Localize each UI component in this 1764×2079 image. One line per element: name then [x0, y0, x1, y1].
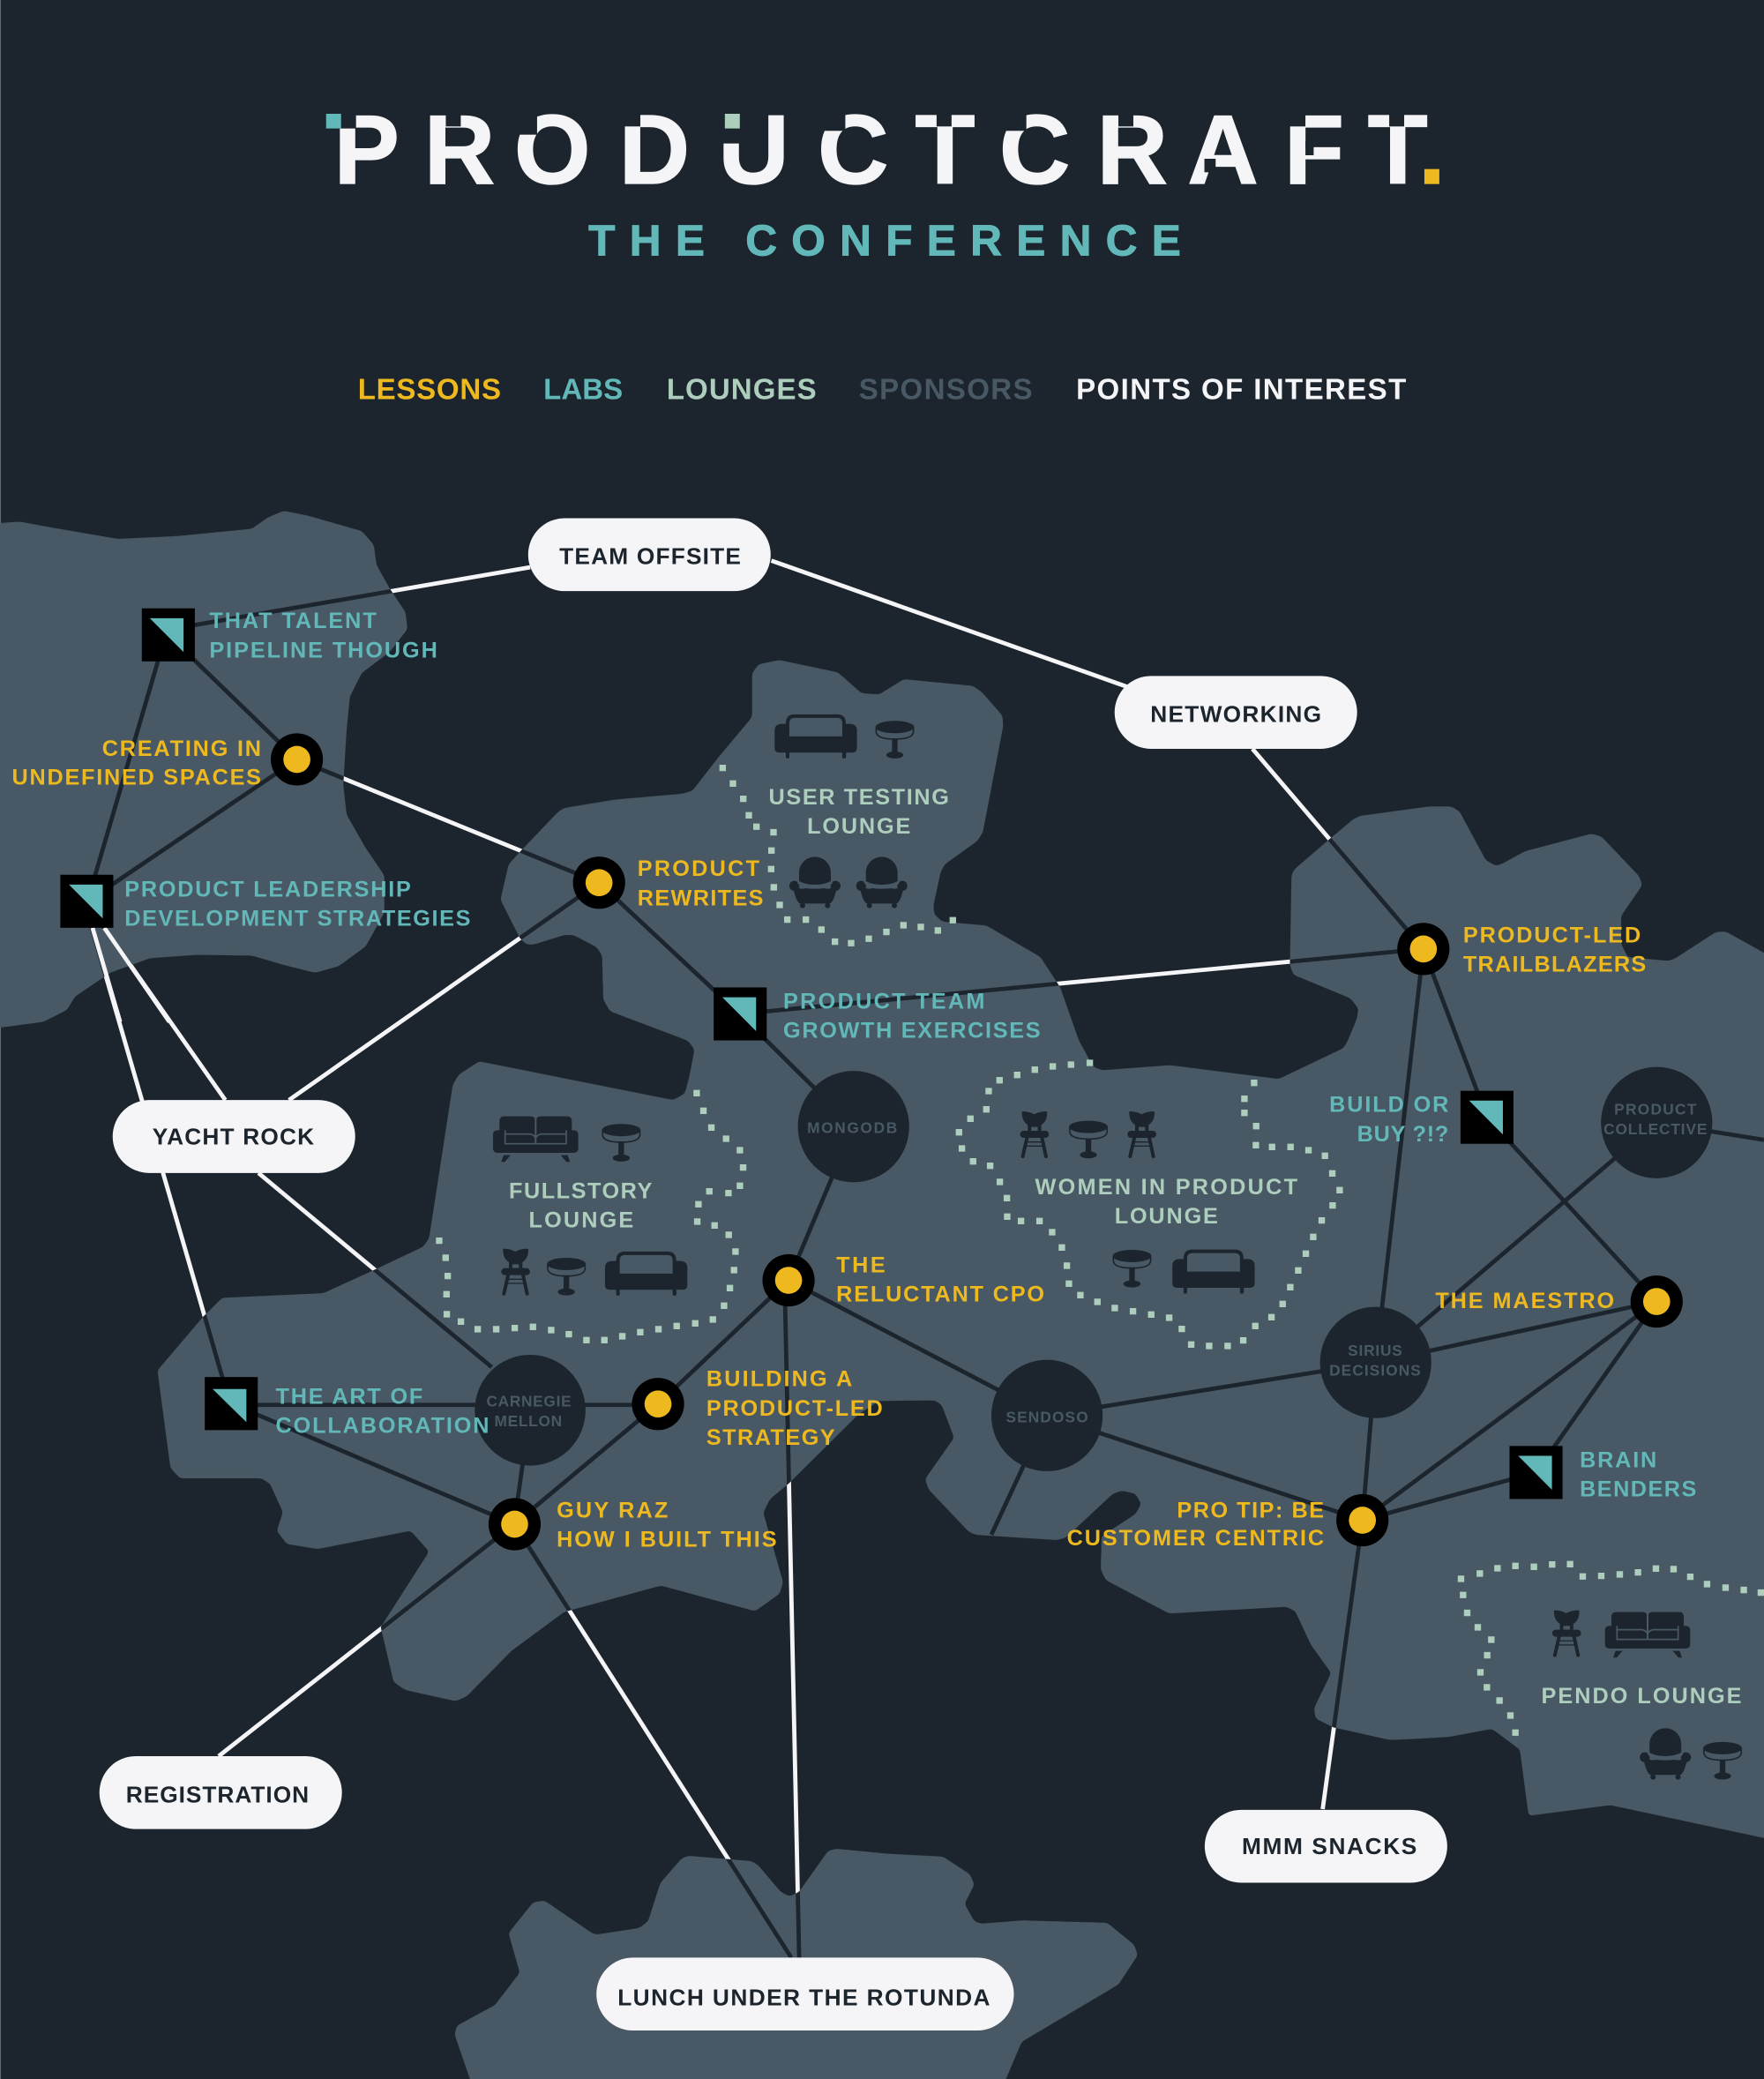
- label: Build or buy: [1329, 1093, 1448, 1147]
- label: Fullstory lounge: [509, 1178, 652, 1232]
- lab node: Product team growth: [714, 987, 766, 1041]
- label: Brain benders: BRAIN: [1580, 1447, 1656, 1472]
- legend: SPONSORS: [859, 373, 1033, 406]
- lesson node: The Maestro: [1631, 1275, 1683, 1327]
- label: Pro tip be customer centric: PRO TIP: BE: [1177, 1498, 1324, 1522]
- label: Pro tip be customer centric: CUSTOMER CENTRIC: [1067, 1526, 1324, 1551]
- lab node: Build or buy: [1461, 1091, 1514, 1144]
- lab node: Brain benders: [1509, 1446, 1563, 1499]
- sponsor: Product Collective: COLLECTIVE: [1603, 1120, 1707, 1138]
- legend: POINTS OF INTEREST: [1076, 373, 1406, 406]
- icons: pendo lounge: [1552, 1611, 1742, 1780]
- label: Product-led trailblazers: PRODUCT-LED: [1463, 923, 1641, 947]
- lesson node: Product rewrites: [573, 856, 625, 909]
- label: That talent pipeline though: PIPELINE THOUGH: [209, 638, 437, 662]
- lab node: The art of collaboration: [205, 1377, 258, 1430]
- label: Product leadership development strategies: PRODUCT LEADERSHIP: [124, 878, 411, 902]
- pill: Yacht rock: YACHT ROCK: [153, 1124, 314, 1150]
- pill: Team offsite: TEAM OFFSITE: [559, 542, 741, 569]
- label: The reluctant CPO: THE: [836, 1253, 886, 1278]
- label: User testing lounge: USER TESTING: [769, 785, 949, 810]
- label: Brain benders: BENDERS: [1580, 1477, 1696, 1501]
- label: Fullstory lounge: LOUNGE: [529, 1208, 633, 1232]
- label: Build or buy: BUILD OR: [1329, 1093, 1448, 1118]
- lab node: That talent pipeline: [142, 609, 195, 662]
- icons: women in product lounge: [1020, 1111, 1255, 1294]
- label: Product-led trailblazers: TRAILBLAZERS: [1463, 952, 1646, 976]
- connector lines on land (dark): [87, 561, 1764, 1957]
- pill: Yacht rock: [113, 1100, 355, 1173]
- label: Guy Raz how I built this: HOW I BUILT THIS: [557, 1528, 777, 1552]
- sponsor: Sirius Decisions: [1320, 1307, 1431, 1418]
- label: That talent pipeline though: [209, 609, 437, 662]
- label: The art of collaboration: THE ART OF: [276, 1384, 422, 1409]
- legend: LABS: [543, 373, 623, 406]
- icons: user testing lounge: [774, 714, 914, 909]
- label: That talent pipeline though: THAT TALENT: [209, 609, 377, 633]
- land masses: [0, 511, 1764, 2079]
- sponsor: Product Collective: [1601, 1067, 1712, 1178]
- dotted boundary: user testing lounge: [722, 768, 953, 943]
- connector lines off-land (white): [87, 561, 1764, 1957]
- label: Product rewrites: REWRITES: [638, 886, 764, 910]
- label: Creating in undefined spaces: [12, 737, 261, 790]
- label: Women in product lounge: WOMEN IN PRODUCT: [1035, 1175, 1298, 1200]
- label: Product team growth exercises: [783, 989, 1041, 1043]
- sponsor: Sirius Decisions: SIRIUS: [1348, 1342, 1402, 1359]
- label: Guy Raz how I built this: [557, 1498, 777, 1552]
- sponsor: Sendoso: [991, 1360, 1102, 1471]
- sponsor: Carnegie Mellon: CARNEGIE: [486, 1392, 572, 1410]
- lesson node: Building a product-led strategy: [632, 1378, 684, 1430]
- label: Building a product-led strategy: [706, 1367, 883, 1450]
- label: The reluctant CPO: [836, 1253, 1044, 1307]
- label: User testing lounge: [769, 785, 949, 839]
- label: Fullstory lounge: FULLSTORY: [509, 1178, 652, 1203]
- dotted boundary: women in product lounge: [959, 1063, 1340, 1346]
- label: Women in product lounge: [1035, 1175, 1298, 1229]
- pill: Registration: [100, 1756, 342, 1829]
- sponsor: Product Collective: PRODUCT: [1614, 1101, 1697, 1118]
- sponsor: MongoDB: [798, 1071, 909, 1182]
- label: Product leadership development strategies: [124, 878, 470, 931]
- pill: Team offsite: [528, 519, 771, 591]
- label: Product rewrites: PRODUCT: [638, 856, 760, 881]
- sponsor: Sirius Decisions: DECISIONS: [1329, 1362, 1421, 1380]
- white paths leaving Product Leadership: [93, 928, 169, 1022]
- label: Product team growth exercises: GROWTH EXERCISES: [783, 1019, 1041, 1043]
- icons: fullstory lounge: [493, 1117, 687, 1296]
- label: Build or buy: BUY ?!?: [1357, 1122, 1448, 1147]
- pill: Networking: NETWORKING: [1150, 701, 1321, 728]
- label: The art of collaboration: [276, 1384, 489, 1438]
- label: Product-led trailblazers: [1463, 923, 1646, 976]
- legend: [358, 373, 1406, 406]
- pill: Lunch under the rotunda: [596, 1957, 1014, 2030]
- label: Product leadership development strategies: DEVELOPMENT STRATEGIES: [124, 907, 470, 931]
- left edge line: [0, 0, 1, 2079]
- sponsor: MongoDB: MONGODB: [807, 1119, 897, 1137]
- pill: Networking: [1115, 676, 1357, 749]
- sponsor: Carnegie Mellon: [475, 1355, 586, 1466]
- pill: Mmm snacks: MMM SNACKS: [1242, 1833, 1416, 1859]
- pill: Lunch under the rotunda: LUNCH UNDER THE ROTUNDA: [617, 1984, 990, 2010]
- label: Building a product-led strategy: BUILDING A: [706, 1367, 852, 1392]
- label: Building a product-led strategy: STRATEGY: [706, 1425, 835, 1450]
- dotted boundary: fullstory lounge: [439, 1093, 744, 1340]
- label: Creating in undefined spaces: UNDEFINED SPACES: [12, 766, 261, 790]
- subtitle: THE CONFERENCE: [588, 215, 1181, 265]
- legend: LESSONS: [358, 373, 501, 406]
- lesson node: Pro tip: [1336, 1494, 1388, 1546]
- label: Creating in undefined spaces: CREATING IN: [102, 737, 261, 761]
- label: The reluctant CPO: RELUCTANT CPO: [836, 1283, 1044, 1307]
- dotted boundary: pendo lounge: [1461, 1564, 1760, 1732]
- label: Pendo lounge: PENDO LOUNGE: [1542, 1684, 1741, 1709]
- label: The Maestro: THE MAESTRO: [1435, 1289, 1614, 1313]
- label: Product rewrites: [638, 856, 764, 910]
- label: Brain benders: [1580, 1447, 1696, 1501]
- pill: Mmm snacks: [1205, 1810, 1447, 1882]
- title: Productcraft wordmark: PRODUCTCRAFT: [334, 94, 1428, 205]
- lab node: Product leadership: [60, 875, 113, 928]
- lesson node: Product-led trailblazers: [1397, 923, 1449, 975]
- label: User testing lounge: LOUNGE: [807, 814, 910, 839]
- lesson node: The reluctant CPO: [762, 1254, 815, 1306]
- sponsor: Carnegie Mellon: MELLON: [494, 1412, 562, 1430]
- pill: Registration: REGISTRATION: [126, 1782, 309, 1808]
- legend: LOUNGES: [667, 373, 817, 406]
- lesson node: Guy Raz: [489, 1498, 541, 1551]
- lesson node: Creating in undefined spaces: [271, 733, 323, 786]
- label: The art of collaboration: COLLABORATION: [276, 1413, 489, 1438]
- label: Guy Raz how I built this: GUY RAZ: [557, 1498, 668, 1522]
- sponsor: Sendoso: SENDOSO: [1005, 1408, 1088, 1425]
- label: Pro tip be customer centric: [1067, 1498, 1324, 1551]
- label: Building a product-led strategy: PRODUCT-LED: [706, 1396, 883, 1421]
- label: Product team growth exercises: PRODUCT TEAM: [783, 989, 984, 1013]
- label: Women in product lounge: LOUNGE: [1115, 1204, 1218, 1229]
